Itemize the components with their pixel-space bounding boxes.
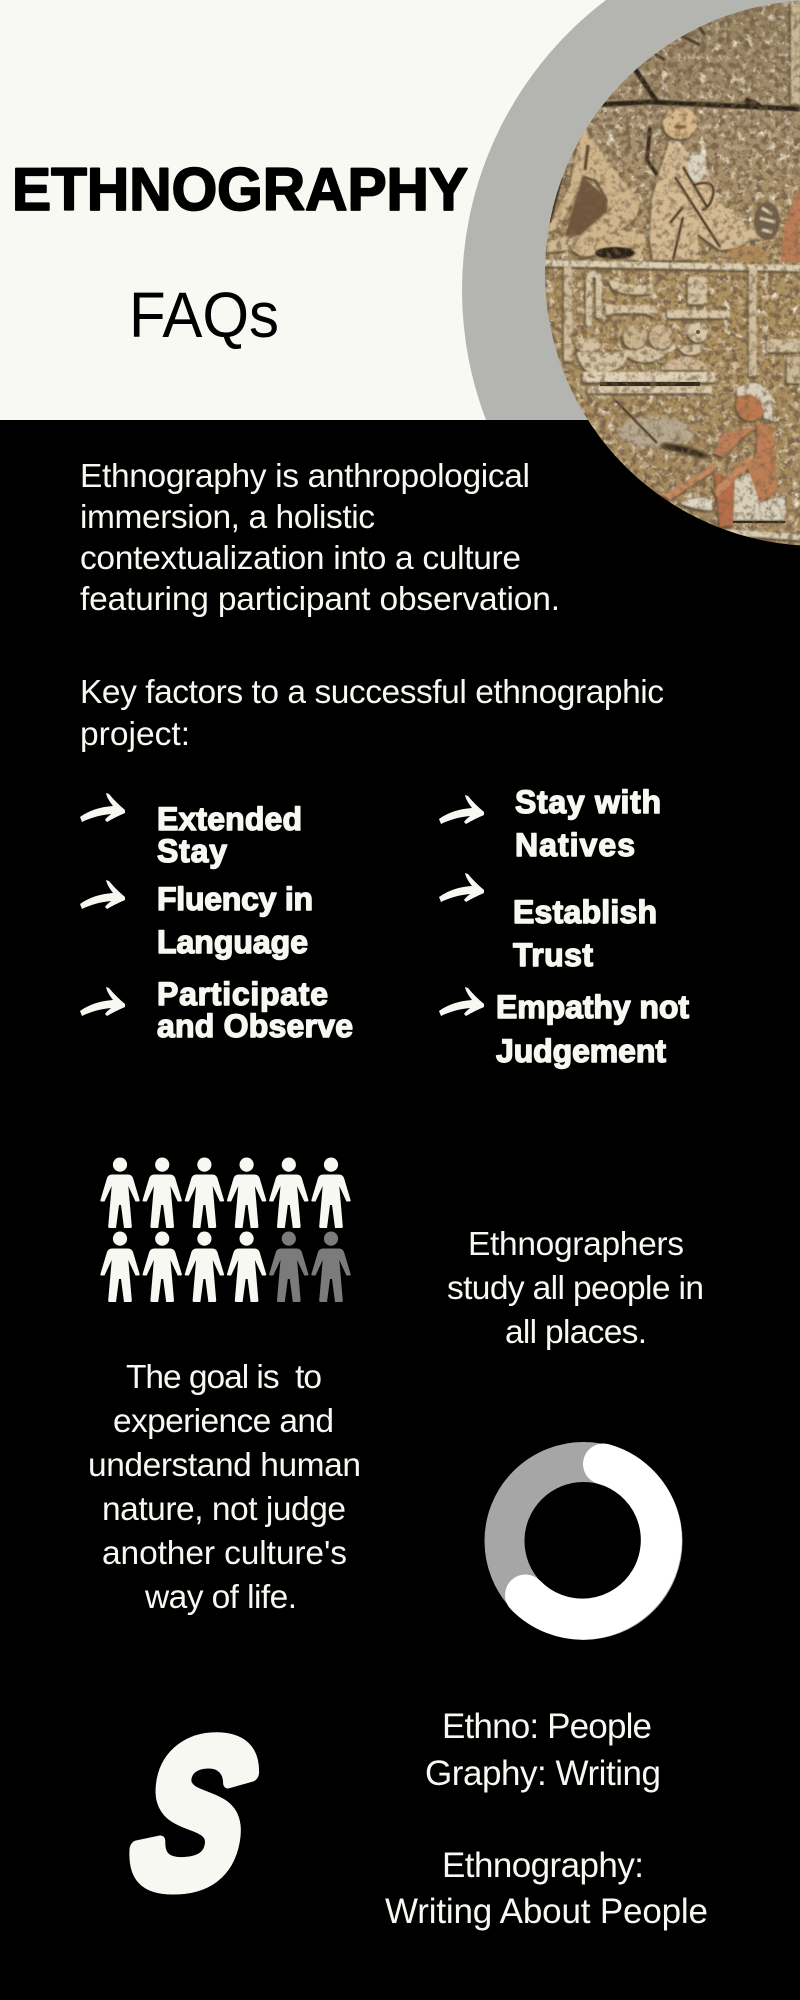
factor: fluency in language: Language — [157, 924, 308, 960]
intro paragraph: Ethnography is anthropological — [80, 458, 530, 495]
image: carved relief in circle — [540, 0, 800, 550]
header panel — [0, 0, 800, 420]
factor: participate and observe: Participate — [157, 976, 328, 1012]
text: etymology: Graphy: Writing — [425, 1754, 661, 1793]
factor: stay with natives — [515, 784, 661, 863]
key factors heading — [80, 674, 664, 753]
offerings — [589, 274, 599, 323]
arrow — [439, 873, 484, 902]
subtitle: FAQs — [129, 279, 279, 351]
factor: establish trust: Trust — [513, 937, 593, 973]
horizontal bars — [545, 263, 800, 268]
key factors heading: project: — [80, 716, 190, 753]
cracks in top block — [600, 26, 800, 176]
pictogram: people — [100, 1158, 351, 1302]
factor: fluency in language: Fluency in — [157, 881, 313, 917]
text: the goal: nature, not judge — [102, 1491, 346, 1528]
arrow — [80, 880, 125, 909]
donut chart — [504, 1462, 662, 1620]
text: etymology: Ethno: People — [442, 1707, 652, 1746]
factor: extended stay: Extended — [157, 801, 302, 837]
intro paragraph: contextualization into a culture — [80, 540, 521, 577]
text: etymology: Ethnography: — [442, 1846, 644, 1885]
text: the goal — [88, 1359, 361, 1616]
factor: empathy not judgement: Empathy not — [496, 989, 689, 1025]
text: etymology — [385, 1707, 708, 1931]
overall grain — [540, 0, 800, 550]
decorative letter S: S — [119, 1697, 268, 1929]
text: the goal: way of life. — [144, 1579, 297, 1616]
key factors heading: Key factors to a successful ethnographic — [80, 674, 664, 711]
text: etymology: Writing About People — [385, 1892, 708, 1931]
arrow — [439, 795, 484, 824]
grey circle — [462, 0, 800, 420]
factor: participate and observe: and Observe — [157, 1008, 353, 1044]
lower stone and shadow — [617, 417, 693, 447]
factor: extended stay — [157, 801, 302, 869]
factor: extended stay: Stay — [157, 833, 227, 869]
text: ethnographers study all people: study all people in — [447, 1270, 704, 1307]
text: ethnographers study all people — [447, 1226, 704, 1351]
arrow — [80, 987, 125, 1016]
arrow — [439, 987, 484, 1016]
factor: stay with natives: Natives — [515, 827, 635, 863]
lower carved figure — [660, 383, 786, 527]
factor: fluency in language — [157, 881, 313, 960]
factor: empathy not judgement: Judgement — [496, 1033, 666, 1069]
factor: establish trust: Establish — [513, 894, 657, 930]
standing figure — [663, 107, 697, 139]
intro paragraph — [80, 458, 560, 618]
title: ETHNOGRAPHY — [12, 156, 468, 223]
factor: establish trust — [513, 894, 657, 973]
arrow — [80, 793, 125, 822]
factor: participate and observe — [157, 976, 353, 1044]
factor: stay with natives: Stay with — [515, 784, 661, 820]
intro paragraph: featuring participant observation. — [80, 581, 560, 618]
kneeling figure — [547, 128, 647, 260]
text: the goal: experience and — [113, 1403, 334, 1440]
text: the goal: another culture's — [102, 1535, 347, 1572]
intro paragraph: immersion, a holistic — [80, 499, 375, 536]
text: ethnographers study all people: all places. — [505, 1314, 647, 1351]
factor: empathy not judgement — [496, 989, 689, 1069]
text: ethnographers study all people: Ethnographers — [468, 1226, 684, 1263]
text: the goal: The goal is to — [126, 1359, 322, 1396]
text: the goal: understand human — [88, 1447, 361, 1484]
vertical bars — [564, 267, 572, 361]
